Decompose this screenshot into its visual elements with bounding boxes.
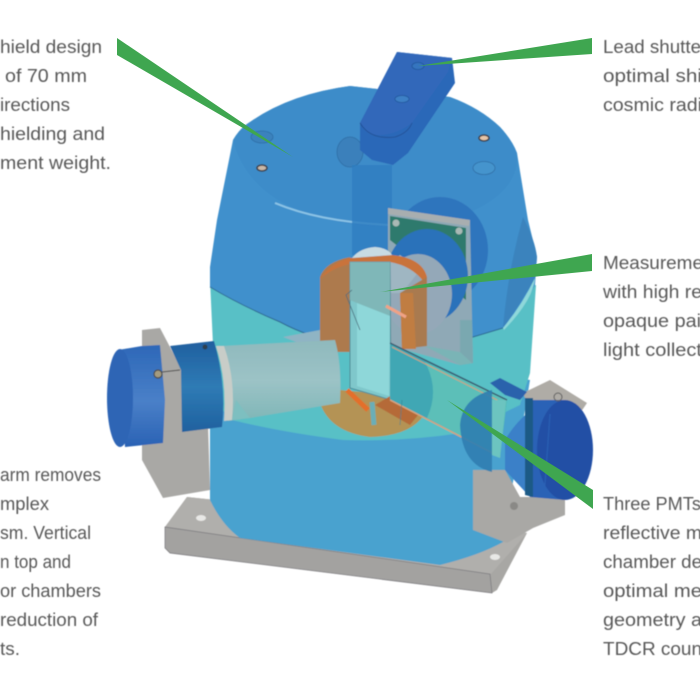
text: lead shutter: cosmic radi [603, 95, 700, 115]
text: lead shutter: optimal shi [603, 66, 700, 86]
right PMT [460, 378, 593, 510]
text: PMTs: reflective m [603, 523, 700, 543]
lower shield body [210, 340, 530, 565]
teal middle band [210, 280, 536, 440]
right horizontal light guide [390, 343, 507, 457]
shutter rod [352, 165, 392, 255]
left PMT bracket [142, 328, 210, 498]
text: arm removes: sm. Vertical [0, 523, 91, 543]
text: arm removes: ts. [0, 639, 20, 659]
text: lead shutter [603, 37, 700, 115]
text: measurement chamber [602, 253, 700, 360]
text: shield design: irections [0, 95, 70, 115]
text: measurement chamber: Measureme [603, 253, 700, 273]
text: PMTs: TDCR coun [603, 639, 700, 659]
text: shield design [0, 37, 111, 173]
text: shield design: of 70 mm [5, 66, 87, 86]
instrument cutaway illustration [107, 52, 593, 593]
text: arm removes: mplex [0, 494, 49, 514]
lead shutter [360, 52, 455, 165]
pointer: measurement chamber [380, 254, 592, 292]
brown shield cylinder [320, 247, 427, 352]
text: arm removes: arm removes [0, 465, 101, 485]
text: measurement chamber: with high re [602, 282, 700, 302]
text: PMTs: chamber de [603, 552, 700, 572]
text: shield design: hield design [0, 37, 102, 57]
measurement chamber [346, 262, 422, 425]
text: shield design: hielding and [0, 124, 105, 144]
text: arm removes: n top and [0, 552, 71, 572]
upper shield dome [210, 86, 537, 345]
text: lead shutter: Lead shutte [603, 37, 700, 57]
text: arm removes: reduction of [0, 610, 99, 630]
text: PMTs: Three PMTs [603, 494, 700, 514]
pointer: PMTs [447, 400, 593, 509]
left PMT [107, 341, 223, 447]
text: PMTs: optimal me [603, 581, 700, 601]
pointer: lead shutter [418, 38, 592, 66]
base plate [165, 497, 527, 593]
text: PMTs [603, 494, 700, 659]
right PMT bracket [473, 380, 587, 543]
pale wedge behind tube [283, 330, 322, 352]
rear PMT [384, 197, 488, 365]
pointer: shield design [117, 38, 293, 157]
text: shield design: ment weight. [0, 153, 111, 173]
lower chamber bowl [320, 390, 424, 437]
text: measurement chamber: opaque pai [603, 311, 700, 331]
left light guide tube [216, 340, 340, 421]
text: arm removes: or chambers [0, 581, 101, 601]
text: PMTs: geometry a [603, 610, 700, 630]
text: measurement chamber: light collect [603, 340, 700, 360]
text: arm removes [0, 465, 101, 659]
